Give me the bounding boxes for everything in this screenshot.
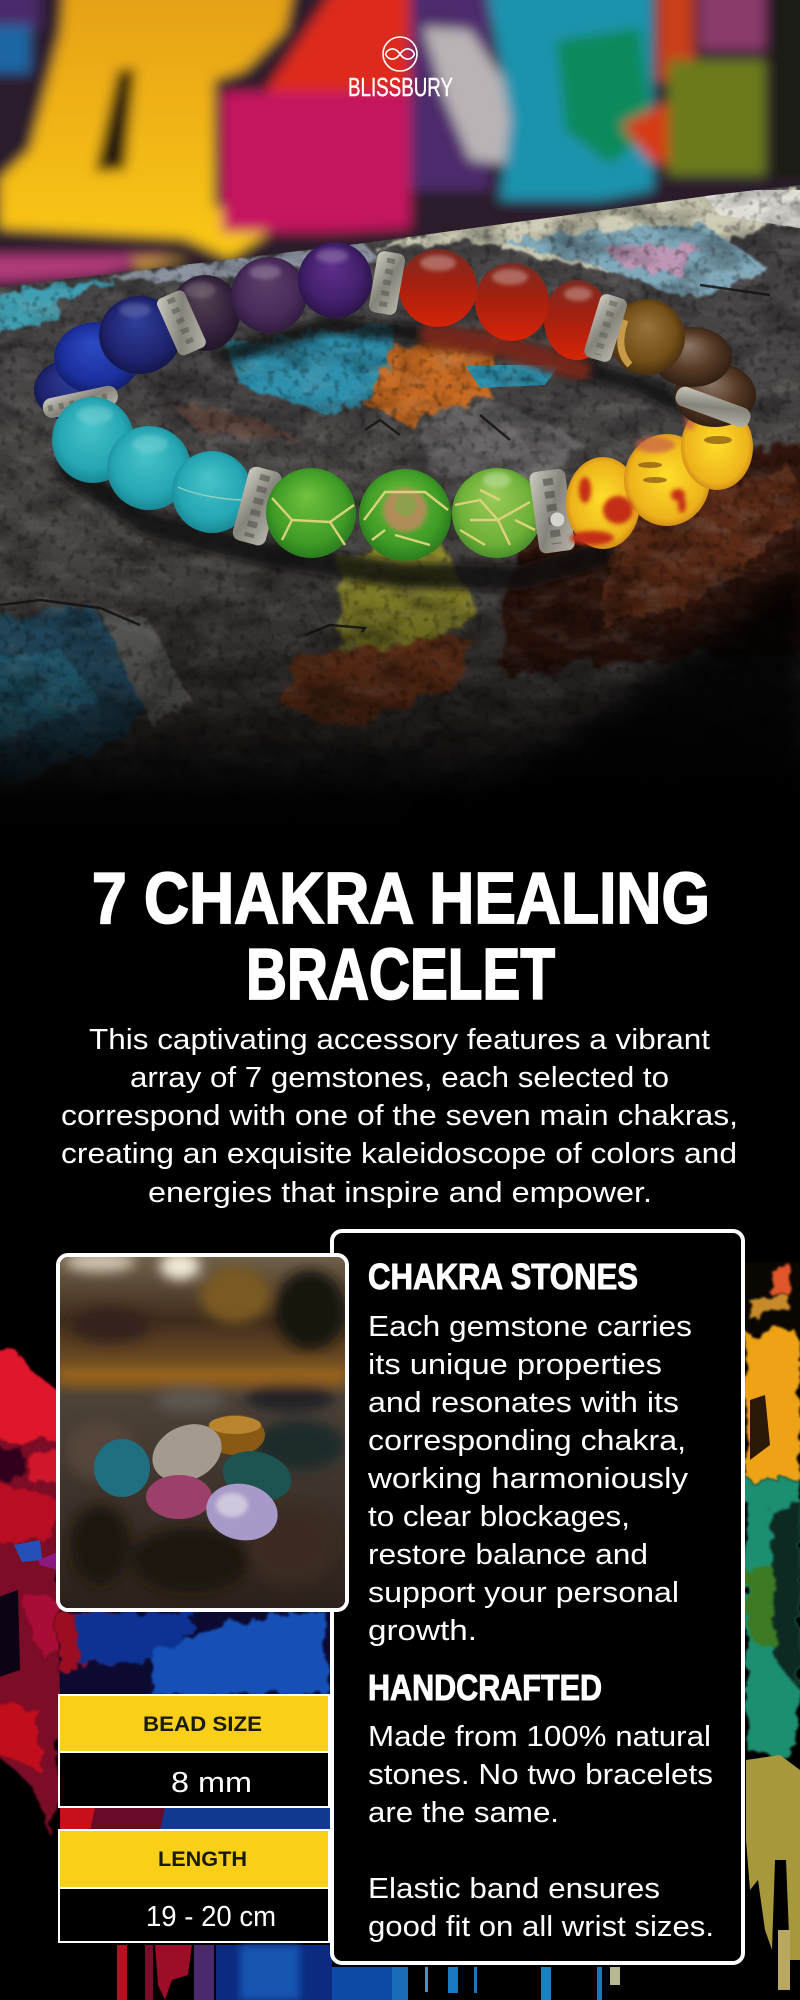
shadow under bracelet (70, 325, 690, 578)
intro paragraph: array of 7 gemstones, each selected to (130, 1062, 669, 1094)
label: BEAD SIZE (143, 1713, 262, 1736)
value: 19 - 20 cm (146, 1901, 276, 1933)
title: 7 CHAKRA HEALING (92, 859, 710, 939)
rock cracks (0, 285, 770, 635)
spec table: length (59, 1830, 329, 1942)
title (92, 859, 710, 1015)
chakra stones text: and resonates with its (368, 1387, 679, 1419)
graffiti wall (0, 0, 800, 300)
label row (59, 1695, 329, 1752)
chakra stones text: corresponding chakra, (368, 1425, 686, 1457)
chakra stones text: restore balance and (368, 1539, 648, 1571)
chakra stones text: Each gemstone carries (368, 1311, 692, 1343)
spacer (231, 465, 284, 547)
intro paragraph (61, 1024, 738, 1209)
intro paragraph: creating an exquisite kaleidoscope of colors and (61, 1138, 737, 1170)
label row (59, 1830, 329, 1888)
chakra stones text: growth. (368, 1615, 477, 1647)
turquoise beads (52, 397, 252, 533)
hero photo: bracelet on painted rock (0, 0, 800, 840)
purple beads (170, 242, 372, 351)
title: BRACELET (246, 935, 555, 1015)
value row (59, 1752, 329, 1807)
spacer (584, 294, 627, 362)
chakra stones text: to clear blockages, (368, 1501, 630, 1533)
spacer (42, 386, 118, 418)
spacer (157, 290, 206, 356)
intro paragraph: correspond with one of the seven main chakras, (61, 1100, 738, 1132)
handcrafted text: stones. No two bracelets (368, 1759, 713, 1791)
handcrafted text (368, 1721, 714, 1943)
value row (59, 1888, 329, 1942)
fade to black (0, 560, 800, 840)
handcrafted text: Elastic band ensures (368, 1873, 660, 1905)
rock surface (0, 185, 800, 785)
photo frame (58, 1255, 347, 1610)
heading: handcrafted: HANDCRAFTED (368, 1667, 602, 1708)
label: LENGTH (158, 1848, 247, 1871)
paint patches on rock (0, 190, 800, 790)
lapis beads (34, 296, 181, 422)
red beads (399, 249, 610, 360)
brown and tiger eye beads (609, 299, 756, 427)
photo content (60, 1252, 345, 1608)
rock texture (0, 186, 800, 762)
handcrafted text: Made from 100% natural (368, 1721, 711, 1753)
stones (94, 1413, 297, 1547)
spacer (529, 468, 576, 554)
brand logo (348, 37, 453, 102)
spec table: bead size (59, 1695, 329, 1807)
panel frame (332, 1231, 743, 1963)
brand name: BLISSBURY (348, 72, 453, 102)
text panel (332, 1231, 743, 1963)
infinity symbol (386, 49, 414, 59)
paint splash: blue under photo (58, 1612, 332, 1831)
amber beads (566, 404, 753, 549)
spacer (368, 250, 406, 316)
chakra stones text: working harmoniously (367, 1463, 689, 1495)
chakra stones text: its unique properties (368, 1349, 662, 1381)
paint splash: right (745, 1262, 800, 1960)
handcrafted text: good fit on all wrist sizes. (368, 1911, 714, 1943)
paint splash: left (0, 1350, 60, 1835)
stones photo (58, 1252, 347, 1610)
bracelet beads (34, 242, 756, 561)
green beads (266, 468, 542, 561)
chakra stones text: support your personal (368, 1577, 679, 1609)
value: 8 mm (171, 1767, 252, 1799)
spacer (676, 386, 750, 428)
logo ring (383, 37, 417, 71)
handcrafted text: are the same. (368, 1797, 559, 1829)
intro paragraph: This captivating accessory features a vibrant (89, 1024, 710, 1056)
intro paragraph: energies that inspire and empower. (148, 1177, 652, 1209)
heading: chakra stones: CHAKRA STONES (368, 1256, 638, 1297)
chakra stones text (367, 1311, 692, 1647)
paint drips: bottom (117, 1930, 790, 2000)
